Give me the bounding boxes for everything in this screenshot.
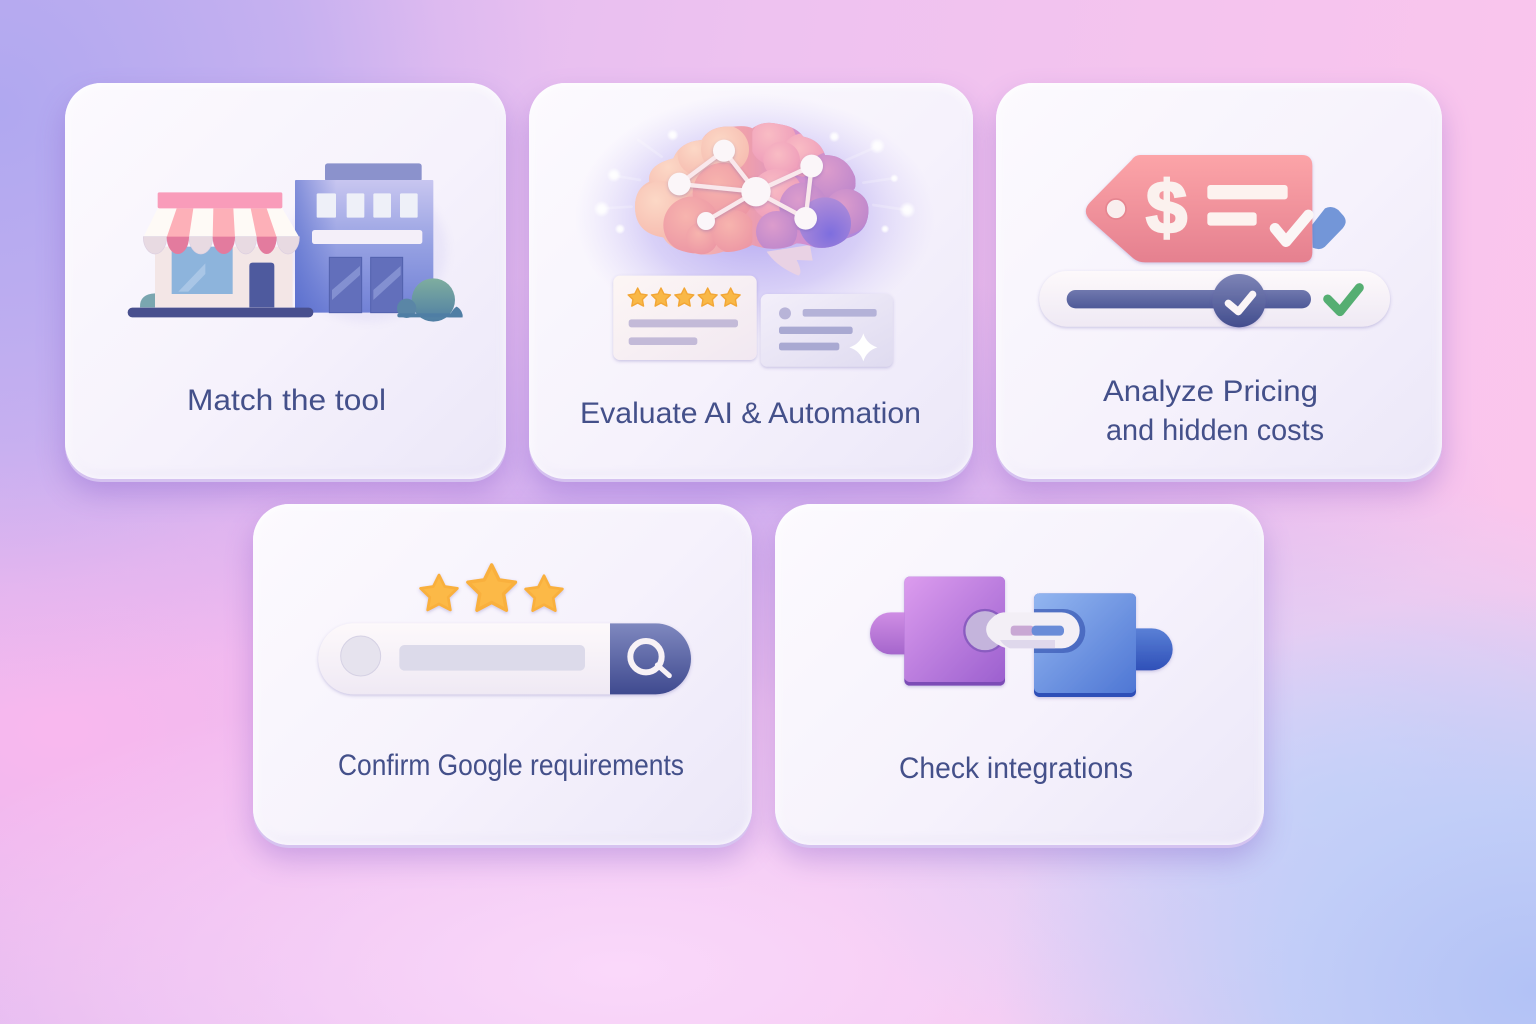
awning stripes (143, 208, 299, 237)
heading: match the tool: Match the tool (187, 384, 386, 417)
heading: confirm Google requirements: Confirm Google requirements (338, 749, 684, 782)
tag blue flap (1312, 207, 1346, 249)
icon: pricing slider (1039, 271, 1390, 327)
heading: evaluate AI: Evaluate AI & Automation (580, 397, 921, 430)
icon: AI brain (596, 108, 912, 324)
heading: analyze pricing: Analyze Pricing (1103, 375, 1318, 408)
brain right lobes (750, 118, 869, 252)
panel: match the tool (65, 83, 506, 479)
awning scallops (143, 237, 299, 254)
brain glow (575, 93, 935, 340)
building soft shadow (287, 178, 447, 322)
dollar sign: $ (1146, 166, 1187, 249)
panel: analyze pricing (996, 83, 1442, 479)
text: and hidden costs: and hidden costs (1106, 414, 1324, 447)
brain silhouette and lobes (635, 122, 868, 254)
brain tail (767, 245, 813, 276)
neural network nodes (668, 140, 823, 230)
icon: storefront and office building (128, 163, 463, 322)
icon: review card (761, 294, 893, 367)
icon: shop (143, 192, 299, 307)
tag body (1086, 155, 1312, 262)
brain left lobes (633, 125, 755, 254)
panel: confirm Google requirements (253, 504, 752, 845)
icon: right bush (397, 278, 463, 322)
icon: ground line (128, 308, 313, 317)
icon: search bar (318, 623, 691, 694)
icon: blue puzzle piece (1034, 593, 1173, 697)
heading: check integrations: Check integrations (899, 752, 1133, 785)
icon: link (986, 612, 1080, 648)
sparkles and rays (593, 129, 916, 234)
panel: check integrations (775, 504, 1264, 845)
five stars (628, 288, 740, 306)
panel: evaluate AI and automation (529, 83, 973, 479)
page artwork layer (128, 108, 1392, 784)
icon: price tag (1086, 155, 1346, 262)
icon: three stars (421, 565, 562, 611)
icon: left bush (140, 293, 155, 307)
icon: purple puzzle piece (870, 577, 1006, 686)
icon: puzzle pieces with link (870, 577, 1173, 697)
icon: rating card (613, 276, 757, 360)
icon: office building (295, 163, 433, 313)
